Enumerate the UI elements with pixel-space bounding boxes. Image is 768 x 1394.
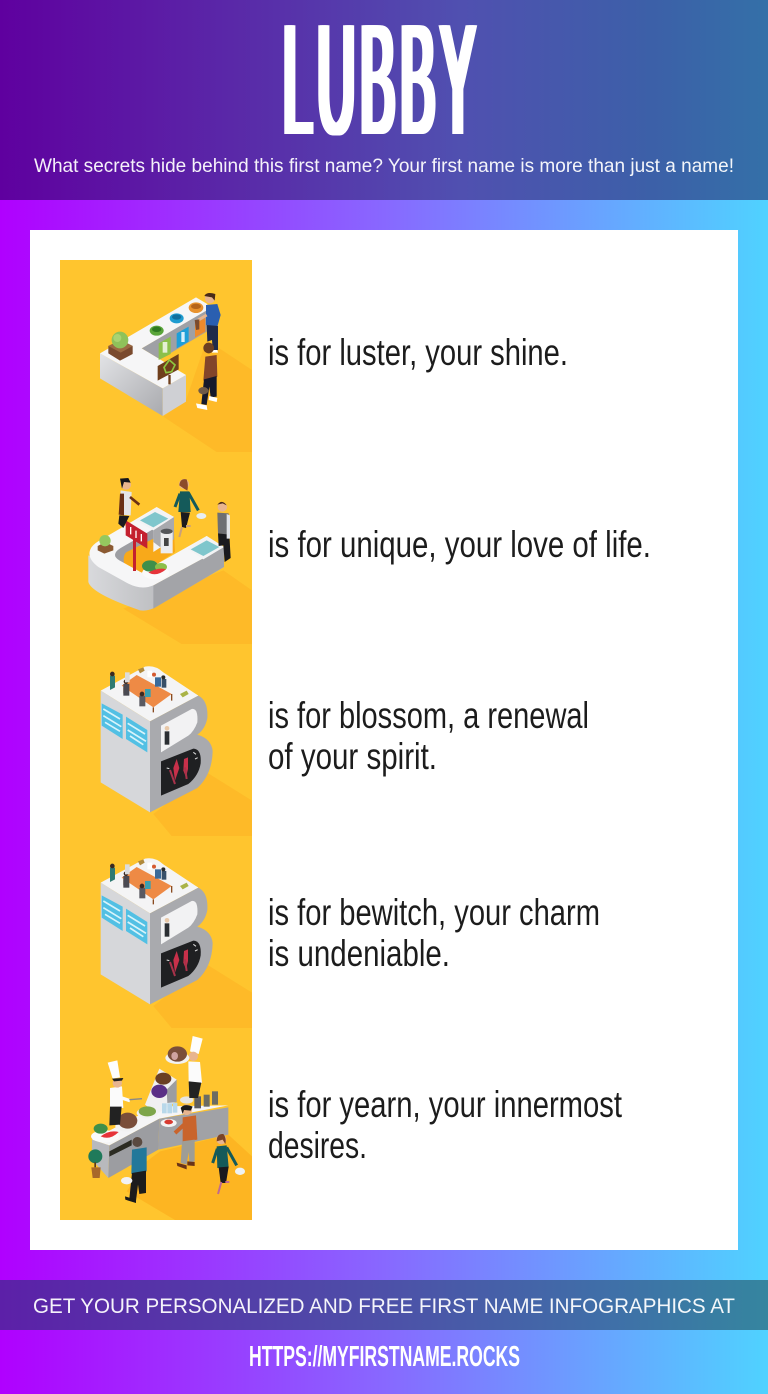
statement: second B xyxy=(268,892,600,974)
woman in teal xyxy=(213,1134,245,1194)
icon: L recycling station xyxy=(60,260,252,452)
icon: Y buffet xyxy=(60,1028,252,1220)
man in brown xyxy=(196,343,217,410)
statement: L: is for luster, your shine. xyxy=(268,332,568,373)
header band xyxy=(0,0,768,200)
icon: first B building xyxy=(60,644,252,836)
chef left xyxy=(108,1060,142,1125)
man in blue sweater xyxy=(121,1137,147,1203)
icon: second B building xyxy=(60,836,252,1028)
statement: Y xyxy=(268,1084,623,1166)
woman in black apron xyxy=(118,478,139,528)
woman in green xyxy=(175,479,206,537)
icon: U food counter xyxy=(60,452,252,644)
statement: second B: is undeniable. xyxy=(268,933,450,974)
man in blue xyxy=(195,293,221,353)
call to action: GET YOUR PERSONALIZED AND FREE FIRST NAME INFOGRAPHICS AT xyxy=(33,1294,735,1318)
statement: first B: of your spirit. xyxy=(268,736,437,777)
statement: U: is for unique, your love of life. xyxy=(268,524,651,565)
white content panel xyxy=(30,230,738,1250)
website url: HTTPS://MYFIRSTNAME.ROCKS xyxy=(249,1341,520,1373)
footer band xyxy=(0,1280,768,1330)
chef right xyxy=(165,1036,203,1098)
statement: Y: desires. xyxy=(268,1125,367,1166)
statement: first B xyxy=(268,695,589,777)
waiter xyxy=(217,502,231,562)
statement: second B: is for bewitch, your charm xyxy=(268,892,600,933)
subtitle: What secrets hide behind this first name? Your first name is more than just a name! xyxy=(34,155,734,177)
statement: first B: is for blossom, a renewal xyxy=(268,695,589,736)
plant xyxy=(88,1149,102,1178)
man in orange shirt xyxy=(161,1104,197,1169)
statement: Y: is for yearn, your innermost xyxy=(268,1084,623,1125)
